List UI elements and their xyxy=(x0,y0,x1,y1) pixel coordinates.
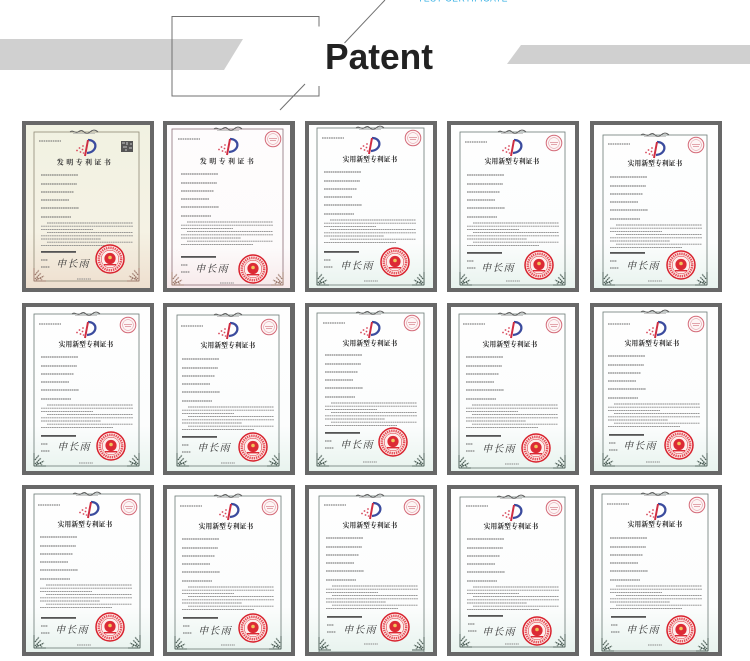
official seal xyxy=(381,248,409,276)
signature: 申长雨 xyxy=(198,625,233,637)
panel: certificate 14 xyxy=(447,485,579,656)
official seal xyxy=(525,251,553,279)
patent office stamp xyxy=(546,135,562,151)
official seal xyxy=(239,433,267,461)
panel: certificate 3 xyxy=(305,121,437,292)
signature: 申长雨 xyxy=(195,263,230,275)
official seal xyxy=(96,613,124,641)
official seal xyxy=(97,432,125,460)
panel: certificate 9 xyxy=(447,303,579,475)
official seal xyxy=(667,616,695,644)
panel: certificate 6 xyxy=(22,303,154,475)
patent office stamp xyxy=(688,316,704,332)
certificate title: 实用新型专利证书 xyxy=(485,156,540,166)
certificate title: 实用新型专利证书 xyxy=(628,520,683,528)
certificate title: 实用新型专利证书 xyxy=(201,340,256,350)
signature: 申长雨 xyxy=(340,439,375,451)
panel: certificate 5 xyxy=(590,121,722,292)
panel: certificate 11 xyxy=(22,485,154,656)
signature: 申长雨 xyxy=(57,441,92,453)
official seal xyxy=(667,251,695,279)
panel: certificate 7 xyxy=(163,303,295,475)
patent office stamp xyxy=(404,315,420,331)
patent office stamp xyxy=(265,131,281,147)
patent office stamp xyxy=(546,500,562,516)
patent office stamp xyxy=(404,499,420,515)
patent office stamp xyxy=(689,497,705,513)
official seal xyxy=(379,428,407,456)
panel: certificate 13 xyxy=(305,485,437,656)
signature: 申长雨 xyxy=(340,260,375,272)
left grey band xyxy=(0,39,243,70)
signature: 申长雨 xyxy=(197,442,232,454)
panel: certificate 10 xyxy=(590,303,722,475)
official seal xyxy=(523,617,551,645)
certificate title: 实用新型专利证书 xyxy=(343,520,398,530)
official seal xyxy=(239,255,267,283)
panel: certificate 8 xyxy=(305,303,437,475)
patent office stamp xyxy=(405,130,421,146)
signature: 申长雨 xyxy=(626,624,661,636)
official seal xyxy=(665,431,693,459)
signature: 申长雨 xyxy=(56,258,91,270)
signature: 申长雨 xyxy=(626,260,661,272)
signature: 申长雨 xyxy=(482,626,517,638)
patent office stamp xyxy=(262,499,278,515)
certificate title: 实用新型专利证书 xyxy=(625,338,680,348)
QR code xyxy=(121,141,133,152)
panel: certificate 15 xyxy=(590,485,722,656)
panel: certificate 1 xyxy=(22,121,154,292)
certificate title: 实用新型专利证书 xyxy=(199,522,254,530)
certificate title: 发明专利证书 xyxy=(57,158,113,166)
official seal xyxy=(96,245,124,273)
signature: 申长雨 xyxy=(623,440,658,452)
certificate title: 实用新型专利证书 xyxy=(343,154,398,164)
signature: 申长雨 xyxy=(482,443,517,455)
title frame xyxy=(172,0,385,110)
certificate title: 实用新型专利证书 xyxy=(343,338,398,348)
patent office stamp xyxy=(688,137,704,153)
patent office stamp xyxy=(121,499,137,515)
official seal xyxy=(381,613,409,641)
certificate title: 发明专利证书 xyxy=(200,156,256,166)
signature: 申长雨 xyxy=(343,624,378,636)
certificate title: 实用新型专利证书 xyxy=(483,340,538,348)
certificate title: 实用新型专利证书 xyxy=(484,522,539,530)
certificate title: 实用新型专利证书 xyxy=(58,520,113,528)
patent office stamp xyxy=(120,317,136,333)
title: Patent xyxy=(325,36,433,77)
official seal xyxy=(239,614,267,642)
certificate title: 实用新型专利证书 xyxy=(59,340,114,348)
panel: certificate 12 xyxy=(163,485,295,656)
panel: certificate 2 xyxy=(163,121,295,292)
official seal xyxy=(522,434,550,462)
panel: certificate 4 xyxy=(447,121,579,292)
certificate title: 实用新型专利证书 xyxy=(628,158,683,168)
patent office stamp xyxy=(546,317,562,333)
patent office stamp xyxy=(261,319,277,335)
signature: 申长雨 xyxy=(481,262,516,274)
signature: 申长雨 xyxy=(55,624,90,636)
right grey band xyxy=(507,45,750,64)
